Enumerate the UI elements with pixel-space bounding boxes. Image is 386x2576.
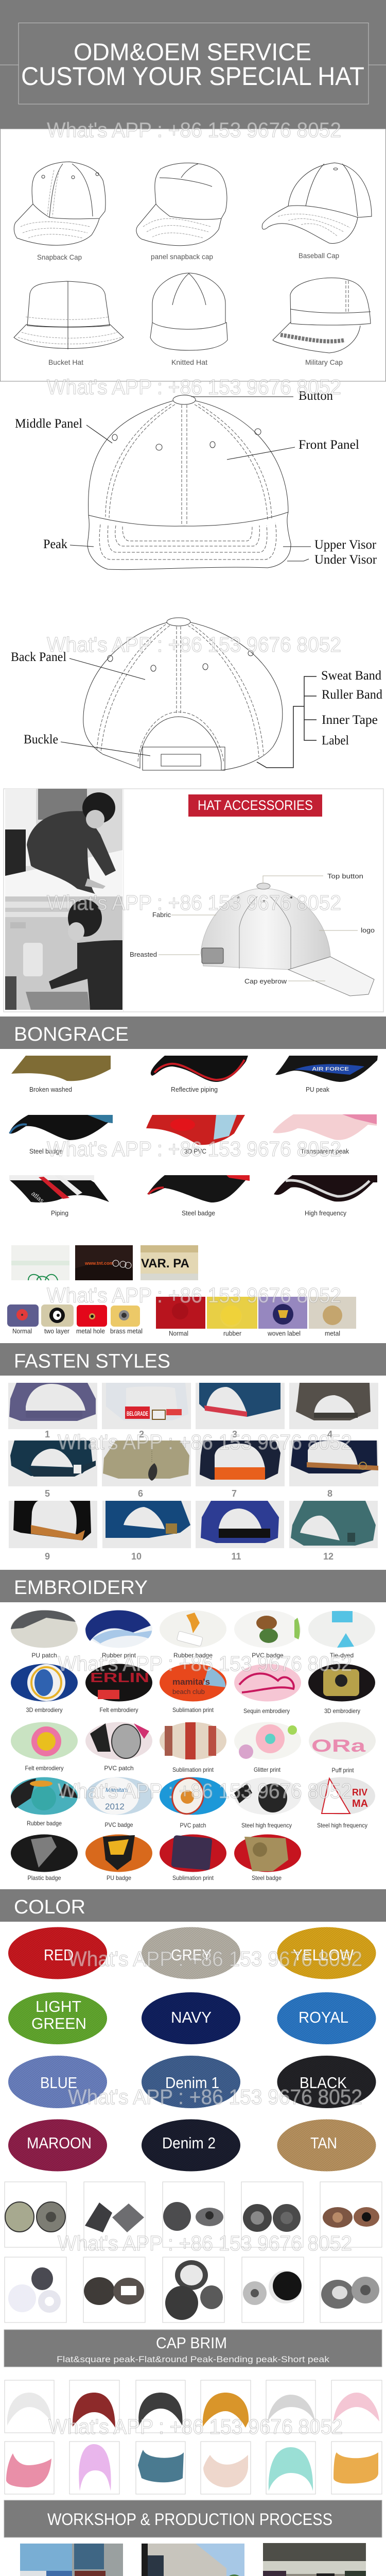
label: button: Button	[299, 389, 333, 403]
caption: pu badge: PU badge	[107, 1874, 131, 1882]
icon: bucket hat	[14, 281, 124, 349]
label: under visor: Under Visor	[314, 553, 377, 567]
visor: reflective piping	[151, 1056, 248, 1082]
caption: brass metal: brass metal	[110, 1327, 143, 1335]
title	[21, 38, 364, 91]
row: top button types	[156, 1297, 356, 1337]
swatch: pvc patch	[85, 1722, 152, 1760]
fastener 6	[102, 1440, 191, 1486]
heading: bongrace	[0, 1016, 386, 1049]
caption: steel high frequency: Steel high frequency	[241, 1822, 292, 1829]
watermarks: What's APP : +86 153 9676 8052	[47, 375, 341, 399]
caption: metal hole: metal hole	[76, 1327, 105, 1335]
caption: rubber badge: Rubber badge	[27, 1820, 62, 1827]
swatch: plastic badge	[11, 1834, 78, 1872]
fastener 7	[196, 1440, 285, 1486]
caption: steel high frequency: Steel high frequency	[317, 1822, 367, 1829]
swatch: pvc badge	[234, 1611, 301, 1648]
header banner	[0, 0, 386, 129]
heading: cap brim: Flat&square peak-Flat&round Peak-Bending peak-Short peak	[57, 2354, 330, 2364]
photos: printed sweatbands: VAR. PA	[141, 1257, 189, 1270]
swatch: denim 1: Denim 1	[165, 2074, 219, 2092]
fastener 4	[289, 1383, 378, 1429]
label: ruller band: Ruller Band	[322, 688, 382, 702]
swatch: navy: NAVY	[171, 2008, 212, 2026]
swatch: grey: GREY	[171, 1946, 212, 1964]
caption: steel badge: Steel badge	[29, 1147, 63, 1155]
caption: glitter print: Glitter print	[254, 1766, 281, 1773]
caption: metal: metal	[325, 1329, 340, 1337]
watermarks: What's APP : +86 153 9676 8052	[47, 891, 341, 914]
caption: normal: Normal	[12, 1327, 32, 1335]
swatch: royal: ROYAL	[299, 2008, 348, 2026]
label: peak: Peak	[43, 537, 67, 551]
swatch: black: BLACK	[300, 2074, 347, 2092]
photos: printed sweatbands: www.tnt.com	[84, 1261, 114, 1266]
swatch: sublimation stripes	[160, 1722, 226, 1760]
fastener 11	[196, 1501, 284, 1548]
number 11: 11	[231, 1551, 241, 1562]
caption: pvc patch: PVC patch	[180, 1822, 206, 1829]
number 4: 4	[327, 1429, 332, 1439]
caption: felt embroidery: Felt embrodiery	[100, 1706, 138, 1714]
visor: high frequency	[274, 1175, 377, 1201]
swatch: rubber print	[85, 1610, 152, 1648]
panel: embroidery swatches	[11, 1610, 376, 1882]
panel: colour swatches	[8, 1927, 376, 2171]
visor: piping atlas	[9, 1175, 109, 1205]
caption: transparent peak: Transparent peak	[301, 1147, 349, 1155]
caption: piping: Piping	[51, 1209, 68, 1217]
swatch: glitter print	[234, 1722, 301, 1760]
swatch: pu patch	[11, 1610, 78, 1648]
fastener 2: BELGRADE	[127, 1410, 148, 1417]
caption: sublimation print: Sublimation print	[172, 1706, 214, 1714]
swatch: rubber badge	[160, 1611, 226, 1648]
heading: bongrace: BONGRACE	[14, 1024, 129, 1045]
swatch: felt embroidery	[85, 1664, 152, 1701]
caption: pvc patch: PVC patch	[104, 1765, 134, 1772]
caption: reflective piping: Reflective piping	[171, 1086, 218, 1093]
swatch: felt embroidery: ERLIN	[90, 1670, 149, 1685]
swatch: blue: BLUE	[40, 2074, 77, 2092]
watermarks: What's APP : +86 153 9676 8052	[58, 1652, 352, 1675]
visor: pu peak	[275, 1056, 378, 1082]
swatch: maroon: MAROON	[27, 2134, 92, 2152]
swatch: steel badge	[234, 1834, 301, 1872]
caption: rubber print: Rubber print	[102, 1652, 136, 1659]
caption: pvc badge: PVC badge	[105, 1821, 133, 1828]
title: CUSTOM YOUR SPECIAL HAT	[21, 62, 364, 91]
caption: felt-style 3d embroidery: 3D embrodiery	[26, 1706, 63, 1714]
heading: embroidery	[0, 1570, 386, 1602]
caption: normal: Normal	[169, 1329, 188, 1337]
swatch: puff print: ORa	[311, 1736, 366, 1756]
photo: factory front	[20, 2544, 123, 2576]
swatch: tan	[277, 2120, 376, 2171]
watermarks: What's APP : +86 153 9676 8052	[58, 2231, 352, 2255]
watermarks: What's APP : +86 153 9676 8052	[68, 1947, 362, 1971]
panel: hat styles	[0, 129, 386, 381]
caption: woven label: woven label	[267, 1329, 301, 1337]
watermarks: What's APP : +86 153 9676 8052	[47, 1137, 341, 1161]
fastener 10	[102, 1501, 191, 1548]
heading: color: COLOR	[14, 1896, 85, 1918]
heading: color	[0, 1889, 386, 1922]
swatch: navy	[142, 1992, 240, 2044]
visor: broken washed	[11, 1056, 111, 1081]
heading: embroidery: EMBROIDERY	[14, 1577, 148, 1599]
number 3: 3	[232, 1429, 237, 1439]
fastener 12	[289, 1501, 378, 1548]
caption: bucket hat: Bucket Hat	[48, 358, 83, 366]
caption: felt embroidery: Felt embrodiery	[25, 1765, 64, 1772]
swatch: 3d embroidery	[11, 1664, 78, 1701]
swatch: tie-dyed	[308, 1611, 375, 1648]
caption: sublimation print: Sublimation print	[172, 1874, 214, 1882]
caption: broken washed: Broken washed	[29, 1086, 72, 1093]
number 10: 10	[131, 1551, 142, 1562]
caption: 3d pvc: 3D PVC	[184, 1147, 206, 1155]
panel: bongrace styles	[9, 1056, 378, 1217]
illustration: cap parts	[130, 872, 375, 996]
caption: knitted hat: Knitted Hat	[171, 358, 207, 366]
caption: steel badge: Steel badge	[182, 1209, 215, 1217]
swatch: denim 2	[142, 2120, 240, 2171]
label: logo: logo	[361, 926, 375, 934]
visor: 3d pvc	[146, 1115, 245, 1145]
swatch: sublimation print: mamita's	[172, 1677, 210, 1687]
number 12: 12	[323, 1551, 334, 1562]
panel: hat accessories	[4, 789, 383, 1012]
panel: brim samples	[5, 2380, 382, 2494]
icon: snapback cap	[14, 162, 106, 245]
label: upper visor: Upper Visor	[314, 538, 377, 552]
caption: sequin embroidery: Sequin embrodiery	[243, 1707, 290, 1715]
heading: workshop and production process: WORKSHOP & PRODUCTION PROCESS	[47, 2510, 332, 2529]
visor: steel badge blue	[9, 1115, 113, 1140]
watermarks: What's APP : +86 153 9676 8052	[47, 633, 341, 656]
number 6: 6	[138, 1488, 143, 1499]
caption: steel badge: Steel badge	[252, 1874, 282, 1882]
swatch: yellow: YELLOW	[293, 1946, 354, 1964]
label: top button: Top button	[327, 872, 363, 880]
swatch: yellow	[277, 1927, 376, 1979]
icon: military cap	[273, 278, 371, 353]
number 1: 1	[45, 1429, 50, 1439]
panel: snap buttons	[5, 2182, 382, 2323]
heading: workshop and production process	[4, 2500, 382, 2537]
number 5: 5	[45, 1488, 50, 1499]
caption: puff print: Puff print	[331, 1767, 354, 1774]
number 9: 9	[45, 1551, 50, 1562]
photo: fabric warehouse	[263, 2543, 366, 2576]
swatch: sublimation print	[160, 1834, 226, 1872]
number 7: 7	[232, 1488, 237, 1499]
visor: transparent peak	[273, 1114, 377, 1140]
swatch: puff print	[309, 1722, 376, 1760]
caption: 3d embroidery: 3D embrodiery	[324, 1707, 360, 1715]
heading: fasten styles	[0, 1343, 386, 1376]
photo: designer drawing	[5, 789, 122, 896]
diagram: cap front	[15, 389, 377, 570]
title: ODM&OEM SERVICE	[74, 38, 311, 65]
fastener 3	[196, 1383, 285, 1429]
heading: cap brim	[4, 2330, 382, 2367]
visor: piping atlas: atlas	[30, 1190, 46, 1205]
watermarks: What's APP : +86 153 9676 8052	[48, 2415, 343, 2438]
watermarks: What's APP : +86 153 9676 8052	[68, 2085, 362, 2109]
swatch: steel high frequency red: MA	[352, 1798, 368, 1809]
icon: knitted hat	[150, 273, 227, 350]
fastener 5	[8, 1440, 97, 1486]
label: inner tape: Inner Tape	[322, 713, 378, 727]
caption: sublimation print: Sublimation print	[172, 1766, 214, 1773]
badge: hat accessories	[188, 794, 322, 817]
swatch: light green: LIGHT	[36, 1997, 81, 2015]
swatch: steel high frequency red: RIV	[352, 1787, 367, 1798]
fastener 9	[9, 1501, 97, 1548]
swatch: pvc badge	[85, 1777, 152, 1815]
swatch: denim 1	[142, 2056, 240, 2108]
label: back panel: Back Panel	[11, 650, 66, 664]
visor: steel badge red	[147, 1175, 250, 1202]
caption: pu patch: PU patch	[31, 1652, 57, 1659]
swatch: felt flower	[11, 1722, 78, 1760]
icon: panel snapback cap	[136, 163, 227, 246]
caption: high frequency: High frequency	[305, 1209, 346, 1217]
swatch: steel high frequency red	[308, 1777, 375, 1815]
watermarks: What's APP : +86 153 9676 8052	[47, 118, 341, 142]
caption: pu peak: PU peak	[306, 1086, 329, 1093]
swatch: red	[8, 1927, 107, 1979]
heading: cap brim: CAP BRIM	[156, 2334, 227, 2352]
swatch: sublimation print	[160, 1664, 226, 1701]
diagram: cap back	[11, 618, 382, 770]
caption: rubber: rubber	[223, 1329, 242, 1337]
caption: tie-dyed: Tie-dyed	[330, 1652, 354, 1659]
heading: fasten styles: FASTEN STYLES	[14, 1351, 170, 1372]
fastener 1	[8, 1383, 97, 1429]
swatch: light green: GREEN	[31, 2014, 86, 2032]
photo: factory side	[142, 2544, 244, 2576]
caption: rubber badge: Rubber badge	[173, 1652, 213, 1659]
label: front panel: Front Panel	[299, 438, 359, 452]
label: label: Label	[322, 734, 349, 748]
label: sweat band: Sweat Band	[321, 669, 381, 683]
watermarks: What's APP : +86 153 9676 8052	[58, 1779, 352, 1803]
watermarks: What's APP : +86 153 9676 8052	[58, 1430, 352, 1454]
swatch: blue	[8, 2056, 107, 2108]
swatch: red: RED	[44, 1946, 74, 1964]
swatch: rubber badge platypus	[11, 1777, 78, 1815]
swatch: black	[277, 2056, 376, 2108]
watermarks: What's APP : +86 153 9676 8052	[47, 1283, 341, 1307]
label: breasted: Breasted	[130, 951, 157, 958]
badge: hat accessories: HAT ACCESSORIES	[198, 798, 313, 813]
caption: panel snapback cap: panel snapback cap	[151, 252, 213, 261]
caption: snapback cap: Snapback Cap	[37, 253, 82, 261]
icon: baseball cap	[262, 163, 372, 243]
swatch: sequin embroidery	[234, 1664, 301, 1701]
swatch: pu badge	[85, 1834, 152, 1872]
swatch: 3d embroidery gold	[308, 1664, 375, 1701]
panel: fasten styles grid	[8, 1383, 378, 1562]
row: eyelet types	[7, 1304, 143, 1335]
caption: plastic badge: Plastic badge	[28, 1874, 61, 1882]
swatch: denim 2: Denim 2	[162, 2134, 216, 2152]
gallery: factory photos	[20, 2543, 366, 2576]
swatch: pvc patch blue	[160, 1774, 226, 1818]
swatch: royal	[277, 1992, 376, 2044]
number 2: 2	[139, 1429, 144, 1439]
swatch: pvc badge: 2012	[105, 1802, 125, 1811]
caption: two layer: two layer	[44, 1327, 70, 1335]
fastener 2	[102, 1383, 191, 1429]
caption: baseball cap: Baseball Cap	[299, 251, 339, 260]
visor: pu peak: AIR FORCE	[312, 1066, 349, 1072]
label: cap eyebrow: Cap eyebrow	[244, 977, 287, 985]
caption: pvc badge: PVC badge	[252, 1652, 284, 1659]
swatch: maroon	[8, 2120, 107, 2171]
swatch: sublimation print: beach club	[172, 1688, 205, 1696]
swatch: pvc badge: Mamita's	[106, 1787, 128, 1793]
label: buckle: Buckle	[24, 733, 58, 747]
fastener 8	[289, 1440, 378, 1486]
watermarks	[47, 118, 362, 2576]
swatch: grey	[142, 1927, 240, 1979]
label: middle panel: Middle Panel	[15, 417, 82, 431]
swatch: light green	[8, 1992, 107, 2044]
swatch: tan: TAN	[310, 2134, 337, 2152]
label: fabric: Fabric	[152, 911, 171, 919]
swatch: steel high frequency	[234, 1777, 301, 1815]
photo: seamstress at machine	[5, 896, 122, 1010]
photos: printed sweatbands	[11, 1245, 198, 1280]
number 8: 8	[327, 1488, 332, 1499]
caption: military cap: Military Cap	[305, 358, 343, 366]
